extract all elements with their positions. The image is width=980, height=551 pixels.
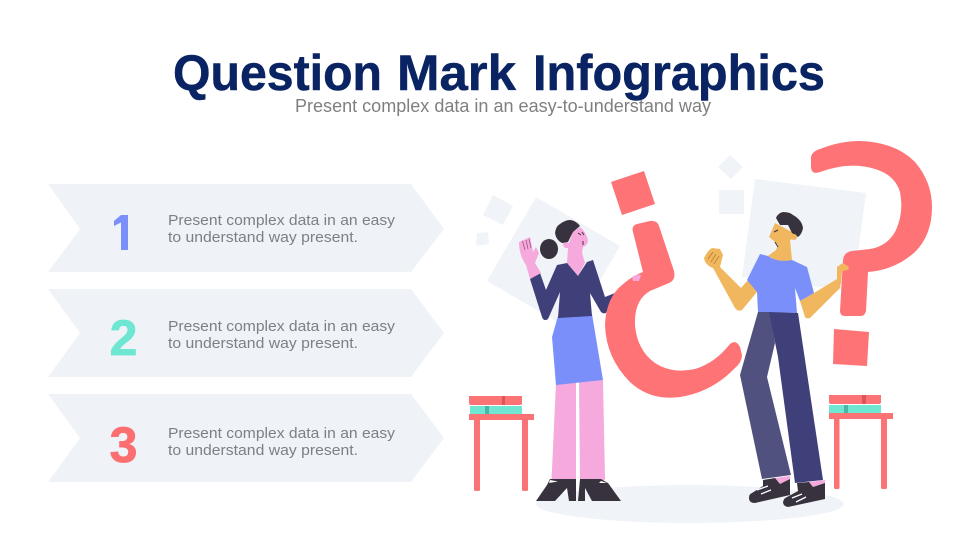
woman hand on question mark	[632, 275, 641, 281]
woman raised hand	[519, 237, 541, 279]
man hand on question mark	[837, 263, 849, 284]
panel: item 3	[48, 394, 444, 482]
dot	[611, 171, 655, 215]
curve	[605, 221, 742, 398]
man socks	[775, 476, 825, 487]
question mark	[811, 141, 932, 366]
panel: item 2	[48, 289, 444, 377]
text block 2: to understand way present.	[168, 335, 358, 352]
woman skirt	[552, 314, 603, 385]
text block 2: Present complex data in an easy	[168, 318, 396, 335]
arrow banner 2	[48, 289, 444, 377]
title	[173, 45, 825, 101]
number 1: 1	[110, 205, 137, 261]
table left with books	[469, 396, 534, 491]
illustration: question marks and two people	[469, 141, 932, 523]
woman neck and face	[563, 227, 588, 276]
woman legs	[552, 380, 605, 480]
subtitle: Present complex data in an easy-to-understand way	[295, 96, 711, 116]
ground shadow	[536, 485, 844, 523]
panel: item 1	[48, 184, 444, 272]
man shoes	[749, 478, 825, 507]
man left arm and fist	[704, 248, 757, 311]
dot	[833, 329, 869, 366]
text block 1: Present complex data in an easy	[168, 212, 396, 229]
text block 3	[168, 425, 396, 459]
title: Question	[173, 45, 382, 101]
text block 1	[168, 212, 396, 246]
woman shoes	[536, 479, 621, 501]
inverted question mark	[605, 171, 742, 398]
text block 3: Present complex data in an easy	[168, 425, 396, 442]
curve	[811, 141, 932, 316]
title: Infographics	[533, 45, 825, 101]
table right with books	[829, 395, 893, 489]
man shirt	[747, 254, 814, 313]
man neck and face	[768, 223, 795, 262]
arrow banner 3	[48, 394, 444, 482]
background squares right	[718, 155, 866, 291]
woman	[519, 220, 621, 501]
man ear	[791, 234, 797, 240]
man	[704, 212, 849, 507]
man trousers	[740, 312, 823, 483]
man right arm	[800, 263, 849, 318]
background squares left	[476, 195, 620, 330]
text block 1: to understand way present.	[168, 229, 358, 246]
number 2: 2	[110, 310, 137, 366]
woman blouse	[530, 260, 615, 320]
number 3: 3	[110, 417, 137, 473]
text block 2	[168, 318, 396, 352]
woman facial features	[578, 232, 584, 245]
man hair	[776, 212, 803, 237]
woman hair	[540, 220, 580, 259]
title: Mark	[397, 45, 516, 101]
text block 3: to understand way present.	[168, 442, 358, 459]
arrow banner 1	[48, 184, 444, 272]
